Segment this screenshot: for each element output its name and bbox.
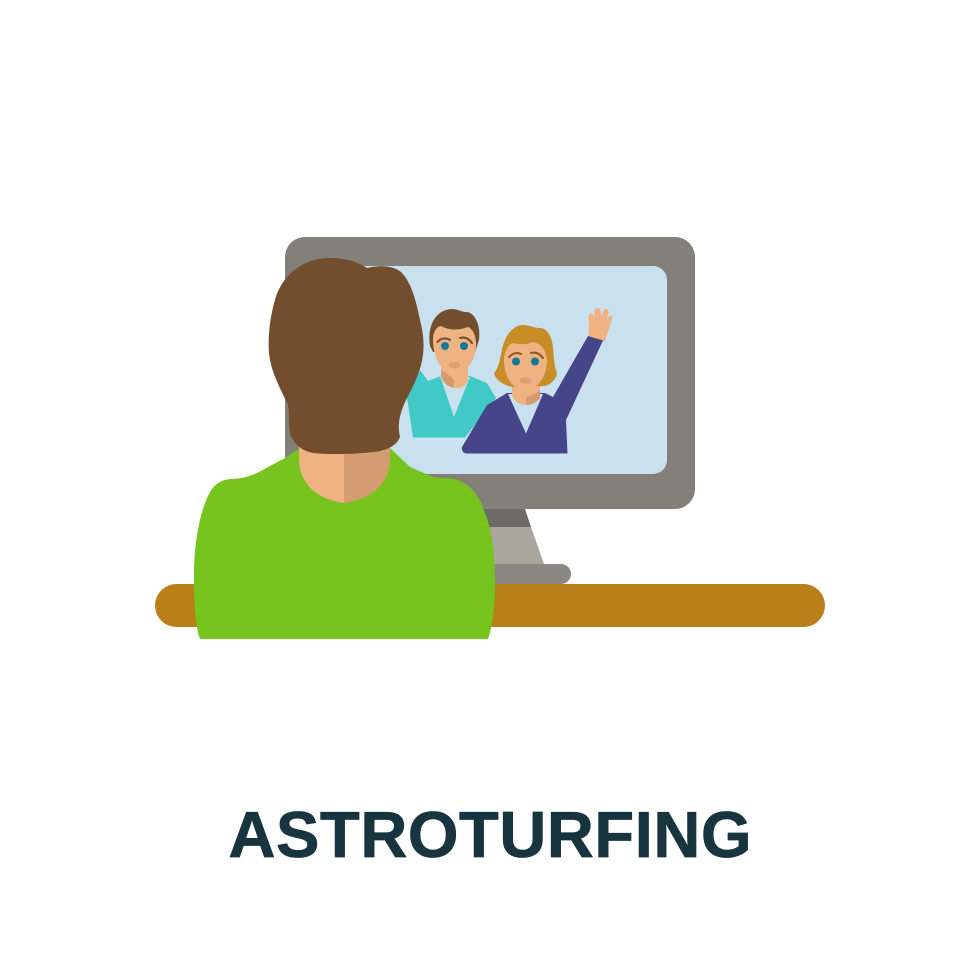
monitor frame [285, 237, 695, 509]
person on screen: man [407, 309, 496, 438]
shirt [194, 448, 495, 639]
monitor stand column [470, 527, 544, 564]
monitor stand base [470, 564, 571, 584]
neck [299, 440, 344, 503]
woman neck [512, 380, 540, 405]
icon: desk [155, 584, 825, 627]
woman eyes [512, 358, 520, 366]
woman hair [494, 325, 557, 387]
monitor screen [314, 266, 667, 474]
woman eyebrows [509, 353, 543, 358]
woman hand [589, 309, 612, 341]
woman blouse [508, 394, 543, 434]
woman mouth [520, 377, 532, 384]
icon: monitor [285, 237, 695, 584]
man eyebrows [438, 338, 472, 343]
man eyes [441, 342, 449, 350]
woman face [504, 342, 547, 390]
man shirt collar [440, 376, 470, 417]
man hair [429, 309, 479, 352]
monitor stand shadow [470, 509, 531, 527]
person on screen: woman waving [462, 309, 612, 454]
person seen from behind [194, 258, 495, 639]
man neck [441, 365, 468, 388]
hair [269, 258, 424, 454]
man face [433, 326, 476, 374]
man shirt [407, 370, 496, 438]
title: ASTROTURFING [228, 798, 752, 871]
woman jacket [462, 336, 603, 454]
man mouth [448, 362, 460, 368]
